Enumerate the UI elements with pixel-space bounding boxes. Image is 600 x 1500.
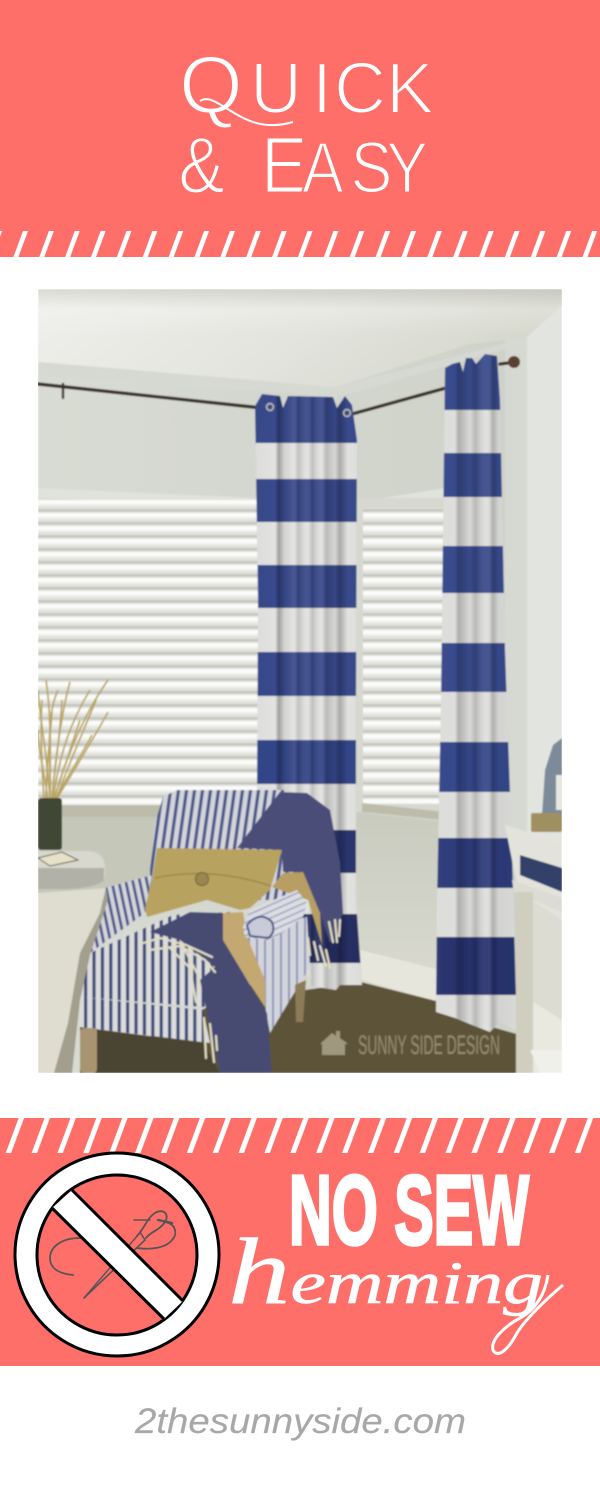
title line 2: E	[261, 120, 307, 210]
g tail flourish	[493, 1275, 563, 1353]
curtain right	[434, 353, 517, 1033]
hatched edge	[0, 231, 600, 257]
Q swash	[200, 99, 293, 125]
photo: corner window with striped curtains and armchair	[38, 289, 564, 1073]
banner panel	[0, 0, 600, 257]
bottom banner	[0, 1118, 600, 1366]
curtain rod	[38, 362, 516, 414]
title: Quick & Easy	[178, 40, 434, 210]
hatched edge	[0, 1118, 600, 1153]
title line 2: A	[302, 128, 344, 209]
right window blinds	[363, 508, 445, 804]
right console table	[505, 825, 562, 920]
crown molding	[38, 338, 526, 398]
curtain left	[250, 390, 365, 1000]
grommets	[267, 404, 350, 416]
hemming text: h emming	[228, 1220, 543, 1324]
seat cushion	[80, 912, 240, 1007]
navy throw lower	[150, 912, 272, 1073]
pillow button	[196, 872, 208, 886]
prohibition slash	[52, 1190, 183, 1319]
title line 1: K	[386, 49, 434, 129]
top banner	[0, 0, 600, 257]
title line 1: C	[334, 49, 386, 129]
mustard pillow	[145, 848, 282, 917]
rod bracket	[62, 384, 64, 398]
website url: 2thesunnyside.com	[134, 1402, 466, 1441]
plant	[38, 680, 108, 800]
prohibition ring	[15, 1153, 219, 1356]
wall	[38, 340, 517, 1073]
arm scroll	[247, 917, 273, 938]
vase	[38, 798, 62, 850]
banner panel	[0, 1118, 600, 1366]
chair back	[150, 790, 300, 900]
chair legs	[80, 1028, 97, 1073]
title line 2: Y	[386, 128, 428, 209]
round side table	[38, 850, 105, 878]
front skirt	[80, 997, 210, 1043]
upper tan throw	[272, 872, 322, 945]
console drawer	[520, 855, 562, 892]
title line 1: I	[312, 49, 332, 129]
baseboard	[360, 950, 440, 1002]
left window blinds	[38, 500, 260, 805]
watermark	[320, 1030, 500, 1060]
right arm	[243, 890, 307, 940]
title line 1: Q	[179, 40, 243, 131]
title line 2: &	[178, 120, 244, 210]
ceiling	[38, 289, 562, 388]
title line 2: S	[351, 128, 392, 209]
title line 1: U	[250, 49, 302, 129]
foreground table left	[38, 888, 107, 922]
needle and thread	[50, 1211, 175, 1298]
navy throw upper	[237, 792, 343, 943]
armchair	[80, 790, 310, 1073]
lower wall	[38, 816, 157, 893]
left arm	[90, 875, 152, 953]
lantern	[542, 738, 562, 815]
right wall	[526, 306, 562, 843]
fringe	[140, 920, 340, 1062]
under-chair shadow	[80, 1027, 220, 1073]
tan throw lining	[223, 912, 265, 1007]
watermark house	[320, 1031, 348, 1055]
rope base	[531, 813, 562, 832]
right side	[245, 917, 310, 1033]
icon: no sewing needle	[15, 1153, 219, 1356]
rod finial	[508, 356, 520, 368]
right window frame	[358, 498, 442, 511]
carpet	[151, 982, 517, 1073]
heading: hemming	[228, 1220, 563, 1353]
book	[38, 852, 78, 866]
